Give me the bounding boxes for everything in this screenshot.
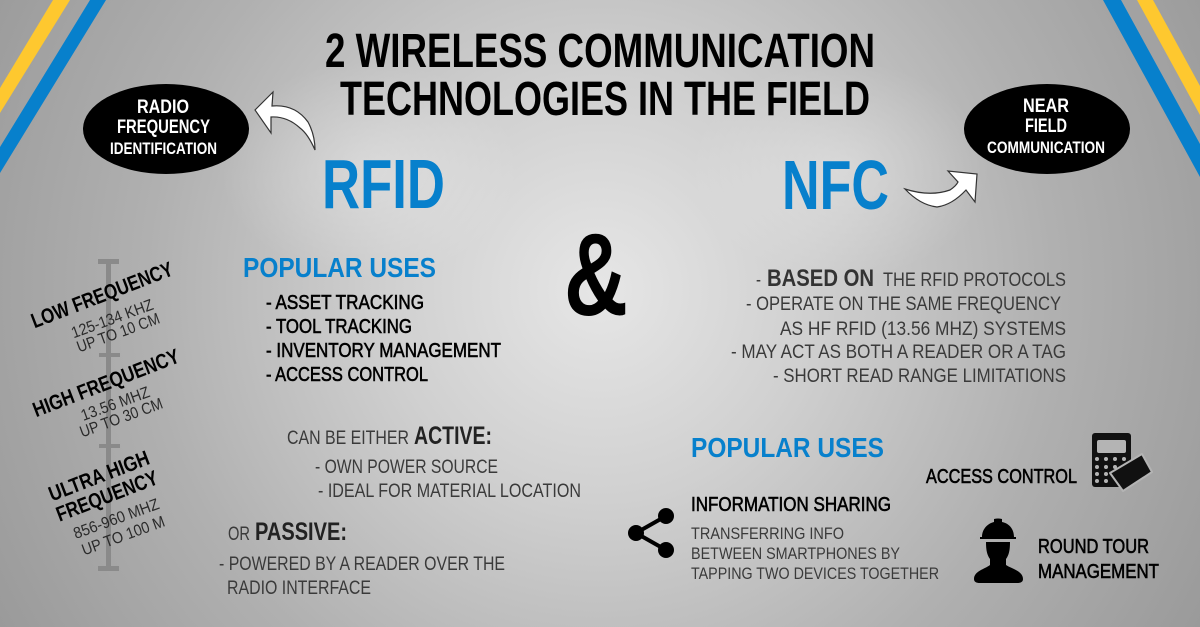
active tags text: ACTIVE: <box>414 422 492 450</box>
icon: share <box>628 508 674 558</box>
active tags text: CAN BE EITHER <box>287 428 409 449</box>
RFID popular uses heading: POPULAR USES <box>243 252 436 283</box>
information sharing text: INFORMATION SHARING <box>691 494 891 516</box>
low frequency label: UP TO 10 CM <box>75 311 162 356</box>
high frequency label: UP TO 30 CM <box>78 396 165 441</box>
RFID popular uses list: - ASSET TRACKING <box>266 292 424 314</box>
access control label: ACCESS CONTROL <box>926 466 1077 488</box>
RFID definition ellipse: RADIO <box>137 97 189 118</box>
low frequency label <box>28 258 176 356</box>
RFID definition ellipse: IDENTIFICATION <box>110 139 217 158</box>
RFID definition ellipse: FREQUENCY <box>117 117 210 138</box>
NFC definition ellipse: NEAR <box>1023 96 1069 117</box>
low frequency label: 125-134 KHZ <box>69 297 156 342</box>
RFID definition ellipse <box>83 84 249 174</box>
passive tags text: - POWERED BY A READER OVER THE <box>219 554 505 575</box>
passive tags text: PASSIVE: <box>255 518 347 546</box>
RFID popular uses list: - INVENTORY MANAGEMENT <box>266 340 501 362</box>
scale axis <box>98 259 120 571</box>
NFC feature list: THE RFID PROTOCOLS <box>883 270 1066 291</box>
NFC popular uses heading: POPULAR USES <box>691 432 884 463</box>
NFC feature list: - SHORT READ RANGE LIMITATIONS <box>773 366 1066 387</box>
passive tags text: OR <box>228 524 250 545</box>
left corner stripes <box>0 0 106 173</box>
NFC feature list: - <box>756 270 761 291</box>
passive tags text <box>219 518 505 599</box>
frequency scale <box>28 258 183 571</box>
RFID popular uses list: - ACCESS CONTROL <box>266 364 428 386</box>
arrow: NFC to ellipse <box>905 171 977 207</box>
round tour management label: ROUND TOUR <box>1038 536 1149 558</box>
information sharing text: BETWEEN SMARTPHONES BY <box>691 544 900 563</box>
low frequency label: LOW FREQUENCY <box>28 258 176 333</box>
round tour management label <box>1038 536 1159 583</box>
information sharing text: TRANSFERRING INFO <box>691 524 844 543</box>
icon: keypad and card <box>1092 433 1152 491</box>
RFID popular uses list <box>266 292 501 386</box>
NFC feature list <box>731 265 1066 387</box>
title: 2 WIRELESS COMMUNICATION <box>325 25 875 78</box>
icon: worker with hard hat <box>974 518 1023 583</box>
passive tags text: RADIO INTERFACE <box>227 578 371 599</box>
active tags text: - IDEAL FOR MATERIAL LOCATION <box>318 481 581 502</box>
title: TECHNOLOGIES IN THE FIELD <box>340 73 870 126</box>
ultra high frequency label: UP TO 100 M <box>80 514 167 559</box>
information sharing text <box>691 494 939 583</box>
round tour management label: MANAGEMENT <box>1038 561 1159 583</box>
active tags text <box>287 422 581 502</box>
NFC feature list: BASED ON <box>767 265 874 292</box>
high frequency label: HIGH FREQUENCY <box>30 345 183 422</box>
NFC feature list: AS HF RFID (13.56 MHZ) SYSTEMS <box>780 319 1066 340</box>
active tags text: - OWN POWER SOURCE <box>315 457 498 478</box>
ultra high frequency label: ULTRA HIGH <box>46 447 153 506</box>
NFC feature list: - OPERATE ON THE SAME FREQUENCY <box>746 294 1061 315</box>
right corner stripes <box>1103 0 1200 177</box>
title <box>325 25 875 126</box>
ultra high frequency label: 856-960 MHZ <box>71 496 162 543</box>
high frequency label <box>30 345 183 441</box>
RFID heading: RFID <box>322 145 445 223</box>
NFC feature list: - MAY ACT AS BOTH A READER OR A TAG <box>731 342 1066 363</box>
RFID popular uses list: - TOOL TRACKING <box>266 316 412 338</box>
NFC definition ellipse: FIELD <box>1025 116 1067 137</box>
ultra high frequency label: FREQUENCY <box>53 467 161 526</box>
high frequency label: 13.56 MHZ <box>79 384 152 425</box>
ampersand: & <box>564 209 628 340</box>
arrow: RFID to ellipse <box>255 92 315 150</box>
NFC heading: NFC <box>782 146 889 224</box>
NFC definition ellipse <box>964 84 1130 174</box>
ultra high frequency label <box>46 447 167 559</box>
information sharing text: TAPPING TWO DEVICES TOGETHER <box>691 564 939 583</box>
NFC definition ellipse: COMMUNICATION <box>987 138 1105 157</box>
